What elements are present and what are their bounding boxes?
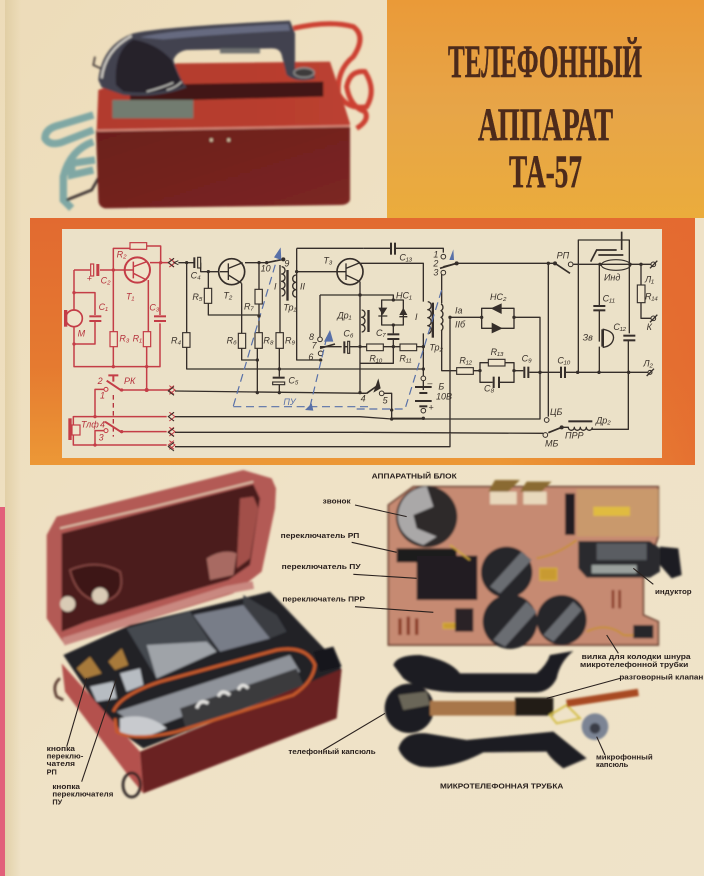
red labels: 4 — [100, 419, 105, 429]
right labels: C₇ — [376, 328, 386, 338]
lid recess — [70, 565, 121, 602]
bell Zv — [601, 329, 614, 347]
carabiner — [67, 178, 98, 200]
paper fold shading — [5, 0, 21, 876]
leader: RP button — [67, 678, 87, 747]
switch 9-10 and 6-8 — [265, 257, 335, 356]
middle labels: 4 — [361, 394, 366, 404]
red labels: 1 — [100, 390, 105, 400]
red labels: 3 — [99, 433, 104, 443]
lock clasp — [123, 773, 140, 797]
handset middle with capsule — [385, 684, 434, 733]
box top face — [97, 62, 350, 132]
lid edge highlight — [60, 482, 253, 528]
right labels: НС₁ — [396, 290, 412, 300]
middle labels: R₇ — [244, 301, 254, 311]
middle labels: R₆ — [227, 335, 237, 345]
right labels: Л₂ — [642, 359, 653, 369]
middle labels: C₅ — [288, 375, 299, 385]
brass buttons — [77, 657, 102, 678]
capacitor C4 — [193, 257, 201, 268]
capacitors C1 C3 — [89, 315, 166, 322]
resistors R4 to R9 — [183, 288, 283, 348]
wires — [550, 705, 580, 723]
schematic paper — [62, 229, 662, 458]
right labels: 3 — [433, 267, 438, 277]
control link PU (dashed) — [233, 247, 370, 411]
name plate — [112, 100, 193, 118]
capacitors C8 C9 C10 — [493, 367, 566, 388]
transistor T2 — [219, 259, 245, 285]
labels: капсюль — [596, 760, 629, 769]
right labels: C₁₃ — [399, 253, 413, 263]
red labels: 2 — [97, 376, 103, 386]
middle labels: R₅ — [192, 292, 203, 302]
right labels: + — [428, 403, 434, 413]
red labels: T₁ — [126, 291, 134, 301]
right labels: ПРР — [565, 430, 584, 440]
resistor R14 — [637, 285, 645, 303]
labels: микрофонный — [596, 752, 653, 761]
label: PU button: ПУ — [52, 797, 63, 806]
middle labels: C₄ — [191, 270, 201, 280]
body front wall — [140, 669, 342, 793]
labels: телефонный капсюль — [288, 747, 376, 756]
box front face — [96, 127, 350, 208]
red labels: C₂ — [101, 275, 111, 285]
right labels: Зв — [583, 333, 593, 343]
dome bright edge — [102, 36, 132, 78]
handset compartment — [117, 655, 300, 732]
capacitor C13 — [390, 243, 396, 255]
bell — [396, 486, 457, 547]
middle labels: 9 — [284, 259, 289, 269]
circuit board — [388, 487, 658, 645]
labels: вилка для колодки шнура — [582, 652, 692, 661]
circuit diagram: line part (right) — [357, 232, 658, 449]
hooks — [197, 685, 248, 708]
lid inner — [62, 484, 260, 632]
diode bridge NS1 — [378, 300, 407, 325]
red labels: R₃ — [119, 334, 130, 344]
lid buttons — [60, 596, 75, 612]
switches — [90, 668, 143, 702]
transformer Tp1 — [282, 267, 296, 301]
transistor T1 — [125, 257, 150, 283]
switch block — [417, 556, 477, 600]
bar switch — [397, 548, 457, 562]
right labels — [369, 249, 658, 449]
strap — [45, 115, 95, 208]
label: RP button: переклю- — [47, 751, 84, 760]
middle labels — [171, 255, 366, 407]
handset top light — [140, 24, 290, 39]
right labels: 10В — [436, 391, 452, 401]
right labels: Др₂ — [595, 415, 611, 425]
right labels: R₁₀ — [369, 354, 383, 364]
switch PK — [104, 375, 122, 437]
right dots — [358, 262, 643, 421]
terminal tabs — [490, 492, 547, 504]
hardware unit and handset parts — [281, 472, 703, 790]
right labels: C₁₁ — [603, 294, 615, 304]
label: PU button: переключателя — [52, 790, 113, 799]
handset upper shell — [393, 651, 573, 692]
diode bridge NS2 — [482, 303, 514, 333]
handset dome — [116, 39, 183, 93]
capacitor 3 — [537, 595, 587, 645]
battery B — [415, 376, 432, 413]
right labels: C₈ — [484, 384, 494, 394]
middle labels: Др₁ — [336, 310, 352, 320]
body left wall — [62, 663, 143, 793]
right labels: Тр₂ — [429, 343, 444, 353]
labels: звонок — [323, 496, 351, 505]
labels: разговорный клапан — [619, 672, 703, 681]
right labels: Инд — [604, 273, 620, 283]
label: PU button: кнопка — [52, 782, 81, 791]
resistors R12 R13 — [457, 359, 505, 374]
line terminals — [647, 261, 657, 376]
resistor R2 — [130, 243, 147, 249]
red labels: Тлф — [81, 419, 99, 429]
transistor T3 — [337, 259, 363, 285]
red labels: R₁ — [133, 334, 142, 344]
photo: telephone TA-57 closed — [45, 21, 371, 208]
label: RP button — [47, 744, 84, 776]
middle dots — [185, 261, 362, 394]
choke Dr1 — [362, 310, 370, 332]
right labels: C₁₀ — [557, 355, 571, 365]
lid lower rim — [63, 585, 253, 642]
leader: PU button — [82, 678, 117, 782]
title panel — [387, 0, 704, 218]
node dots — [72, 261, 162, 447]
switch 4-5 — [367, 378, 384, 396]
label: RP button: РП — [47, 767, 57, 776]
labels: переключатель ПУ — [282, 562, 361, 571]
middle labels: C₆ — [343, 329, 354, 339]
middle labels: 10 — [261, 264, 271, 274]
resistors R3 R1 — [110, 332, 151, 347]
middle labels: 6 — [308, 352, 313, 362]
capacitor C5 — [273, 377, 285, 385]
right labels: R₁₄ — [645, 291, 658, 301]
right labels: 1 — [433, 249, 438, 259]
labels: индуктор — [655, 587, 692, 596]
circuit diagram: amplifier (middle part) — [168, 247, 370, 451]
red labels: + — [87, 274, 92, 284]
right labels: C₉ — [522, 353, 532, 363]
capacitor 1 — [481, 547, 532, 598]
label: PU button — [52, 782, 113, 806]
cradle ring — [294, 68, 314, 77]
board photo — [385, 480, 682, 768]
photo: telephone opened — [47, 470, 342, 806]
middle labels: 8 — [309, 332, 314, 342]
middle labels: R₉ — [285, 335, 295, 345]
middle labels: 7 — [312, 340, 318, 350]
capacitor 2 — [483, 594, 537, 649]
label: RP button: чателя — [47, 759, 75, 768]
front rivets — [210, 135, 230, 144]
right labels: Б — [438, 381, 444, 391]
pink edge strip — [0, 507, 5, 876]
labels: переключатель ПРР — [282, 595, 365, 604]
handset lower shell — [398, 732, 587, 768]
telephone capsule and switch — [68, 418, 122, 440]
circuit diagram: handset (red part) — [64, 243, 175, 449]
lid outer — [47, 470, 276, 645]
middle labels: Тр₁ — [283, 303, 297, 313]
inductor Ind — [591, 232, 631, 270]
middle labels: ПУ — [283, 397, 297, 407]
right labels: R₁₁ — [399, 354, 412, 364]
switch RP — [553, 261, 573, 273]
red labels — [78, 249, 160, 443]
title: line 2: АППАРАТ — [478, 99, 613, 151]
leaders — [323, 505, 653, 755]
middle labels: R₄ — [171, 335, 181, 345]
labels — [281, 472, 703, 790]
resistors R10 R11 — [367, 344, 417, 351]
middle labels: I — [274, 281, 277, 291]
labels: АППАРАТНЫЙ БЛОК — [372, 472, 457, 481]
dashed control link — [357, 290, 442, 409]
cord — [293, 24, 371, 128]
orange cable — [113, 649, 315, 737]
right labels: К — [647, 322, 653, 332]
microphone M — [64, 310, 82, 327]
handset shadow — [130, 82, 323, 102]
right labels: 5 — [383, 395, 389, 405]
mic capsule — [582, 713, 608, 740]
transformer Tp2 — [428, 302, 443, 338]
contacts TsB MB PRR — [543, 418, 564, 437]
label: RP button: кнопка — [47, 744, 76, 753]
gray block — [127, 612, 217, 678]
right labels: ЦБ — [550, 407, 563, 417]
lid pocket — [237, 497, 258, 568]
right labels: Л₁ — [644, 275, 654, 285]
wiring — [537, 540, 647, 635]
top edge highlight — [97, 126, 350, 131]
middle labels: T₃ — [323, 255, 333, 265]
middle labels: R₈ — [263, 335, 274, 345]
capacitor C6 — [343, 341, 350, 353]
inductor — [578, 541, 660, 578]
right labels: I — [415, 312, 418, 322]
red labels: РК — [124, 376, 136, 386]
labels: МИКРОТЕЛЕФОННАЯ ТРУБКА — [440, 781, 564, 790]
labels: микротелефонной трубки — [580, 660, 688, 669]
transformer plate — [577, 489, 658, 537]
red labels: C₁ — [99, 302, 108, 312]
capacitor C2 — [91, 264, 99, 276]
right labels: C₁₂ — [613, 322, 627, 332]
right labels: Ia — [455, 305, 462, 315]
right labels: R₁₂ — [459, 355, 473, 365]
metal cover — [193, 605, 270, 652]
right labels: IIб — [455, 319, 466, 329]
capacitor C7 — [387, 333, 399, 340]
red labels: М — [78, 329, 86, 339]
schematic band — [30, 218, 695, 465]
right top corner — [313, 647, 342, 672]
earpiece hook — [93, 57, 101, 68]
labels: переключатель РП — [281, 531, 359, 540]
right labels: R₁₃ — [491, 347, 504, 357]
handle clip — [220, 48, 260, 53]
capacitors C11 C12 — [593, 305, 635, 341]
dome glints — [147, 82, 182, 92]
handset cord — [567, 692, 638, 703]
title: line 3: ТА-57 — [509, 146, 582, 198]
handset body — [98, 21, 315, 96]
red labels: R₂ — [117, 249, 127, 259]
red labels: C₃ — [149, 303, 160, 313]
right labels: – — [426, 378, 433, 388]
right labels: РП — [557, 250, 570, 260]
right labels: НС₂ — [490, 292, 507, 302]
right labels: 2 — [432, 259, 438, 269]
small parts — [443, 545, 557, 628]
middle labels: II — [300, 281, 305, 291]
body inside — [63, 592, 342, 748]
switch 1-3 — [440, 249, 459, 275]
middle labels: T₂ — [223, 290, 233, 300]
right labels: МБ — [545, 439, 558, 449]
choke Dr2 — [562, 420, 592, 430]
ring — [55, 678, 63, 700]
